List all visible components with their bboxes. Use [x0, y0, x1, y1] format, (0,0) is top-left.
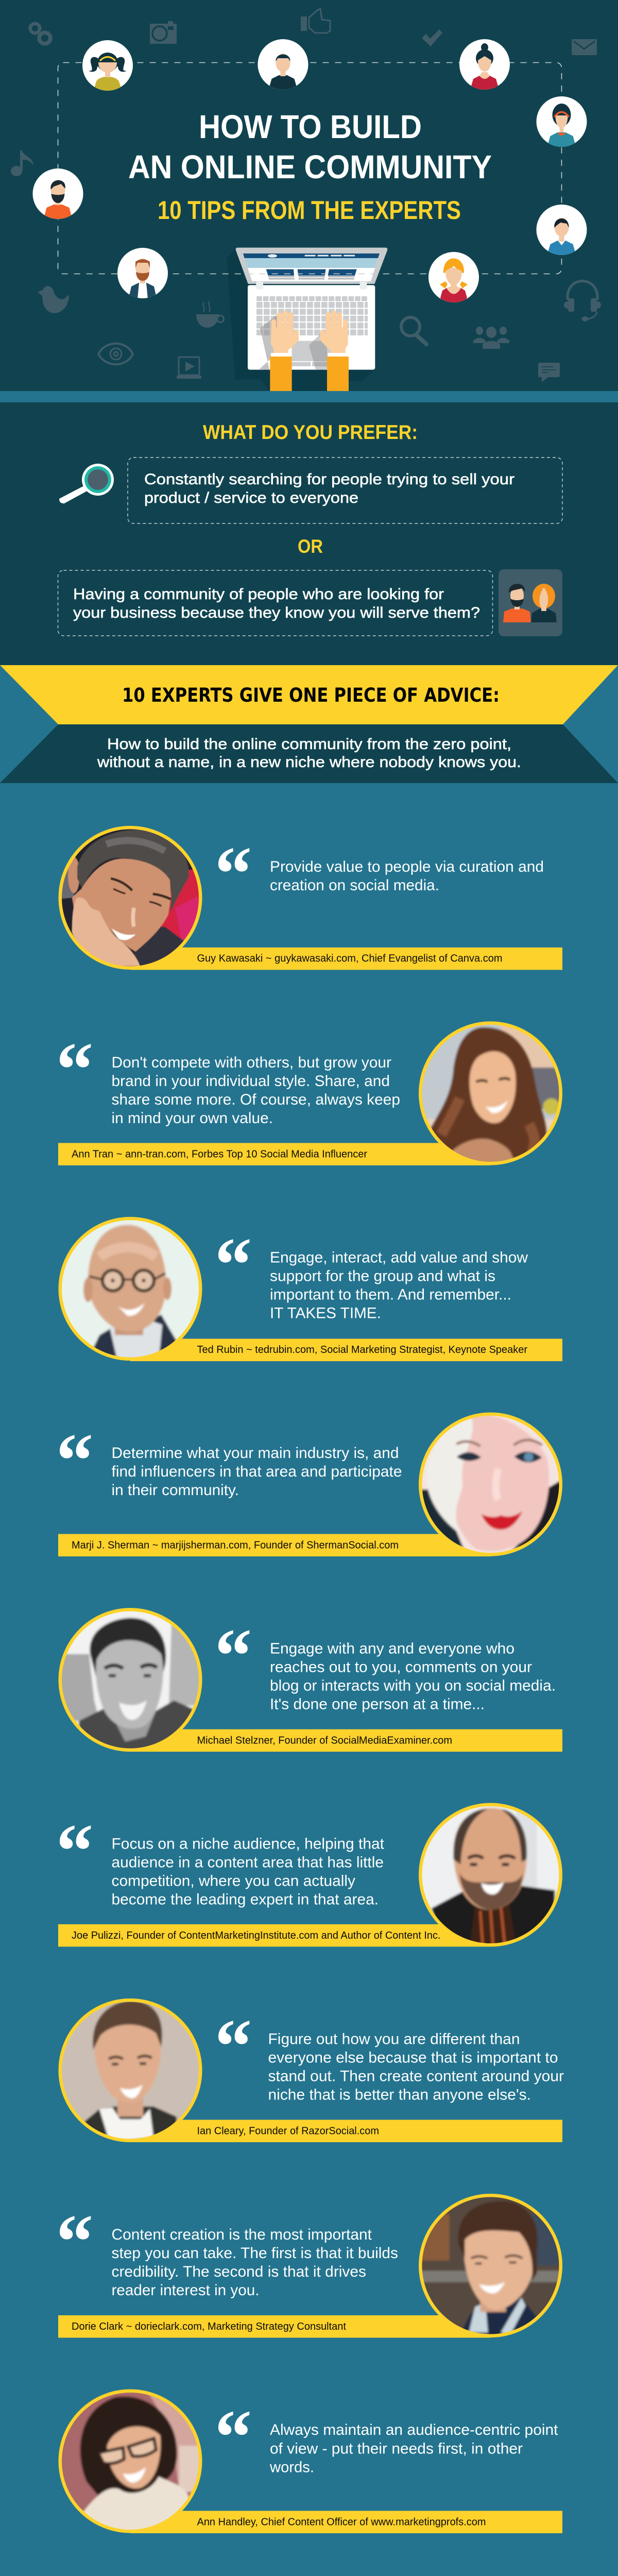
option 1 box: product / service to everyone	[144, 489, 358, 506]
icon: music note	[11, 150, 33, 176]
portrait	[58, 1998, 202, 2142]
quote text: everyone else because that is important to	[268, 2049, 558, 2066]
quote text: audience in a content area that has little	[111, 1854, 384, 1871]
quote text	[270, 1640, 556, 1713]
icon: chat bubble	[538, 363, 560, 382]
author ribbon: Dorie Clark ~ dorieclark.com, Marketing Strategy Consultant	[72, 2321, 346, 2332]
avatar: man in blue shirt	[537, 205, 587, 256]
icon: check mark	[422, 29, 442, 46]
portrait	[58, 826, 202, 970]
portrait	[58, 1217, 202, 1361]
quote text: It's done one person at a time...	[270, 1696, 485, 1713]
banner: dark subheading	[0, 724, 618, 783]
panel: expert 9 Ann Handley	[58, 2389, 562, 2533]
panel: header	[0, 0, 618, 391]
panel: expert 6 Joe Pulizzi	[56, 1803, 562, 1947]
option 2 box	[58, 570, 492, 636]
quote text	[270, 1249, 528, 1322]
icon: video player	[177, 357, 201, 379]
heading: 10 experts: 10 EXPERTS GIVE ONE PIECE OF ADVICE:	[122, 684, 500, 706]
quote text: blog or interacts with you on social media.	[270, 1677, 556, 1694]
avatar: bearded man in jacket	[117, 248, 168, 299]
quote text: important to them. And remember...	[270, 1286, 511, 1303]
author ribbon: Joe Pulizzi, Founder of ContentMarketingInstitute.com and Author of Content Inc.	[72, 1930, 441, 1941]
author ribbon	[130, 1729, 562, 1752]
portrait	[418, 2194, 562, 2338]
icon: magnifier	[401, 317, 426, 344]
quote mark: “	[56, 1027, 93, 1112]
quote text: share some more. Of course, always keep	[111, 1091, 400, 1108]
quote text: step you can take. The first is that it builds	[111, 2245, 398, 2262]
quote text: support for the group and what is	[270, 1267, 495, 1285]
heading: what do you prefer: WHAT DO YOU PREFER:	[203, 421, 418, 444]
panel: expert 7 Ian Cleary	[58, 1998, 564, 2142]
quote text: words.	[269, 2459, 314, 2476]
icon: thumbs up	[301, 9, 330, 33]
dashed frame	[58, 63, 561, 274]
quote text: in their community.	[111, 1482, 239, 1499]
quote text: credibility. The second is that it drives	[111, 2263, 366, 2280]
quote text: of view - put their needs first, in other	[270, 2440, 523, 2458]
quote text: niche that is better than anyone else's.	[268, 2087, 531, 2103]
icon: headphones	[564, 281, 601, 321]
author ribbon: Guy Kawasaki ~ guykawasaki.com, Chief Evangelist of Canva.com	[197, 953, 503, 964]
icon: laptop with typing hands	[227, 248, 387, 391]
panel: expert 4 Marji J. Sherman	[56, 1412, 562, 1556]
author ribbon	[130, 2511, 562, 2533]
author ribbon: Michael Stelzner, Founder of SocialMediaExaminer.com	[197, 1735, 452, 1747]
icon: coffee cup	[196, 301, 224, 328]
author ribbon: Ann Tran ~ ann-tran.com, Forbes Top 10 Social Media Influencer	[72, 1149, 367, 1160]
quote mark: “	[56, 2199, 93, 2284]
quote text	[111, 1054, 400, 1127]
author ribbon	[58, 1534, 491, 1556]
quote mark: “	[215, 2004, 252, 2089]
icon: camera	[150, 21, 177, 44]
portrait	[418, 1021, 562, 1165]
quote text: Don't compete with others, but grow your	[111, 1054, 391, 1071]
hands	[259, 311, 349, 391]
author ribbon: Ted Rubin ~ tedrubin.com, Social Marketing Strategist, Keynote Speaker	[197, 1344, 527, 1355]
quote text: Determine what your main industry is, and	[111, 1445, 399, 1462]
quote text: Content creation is the most important	[111, 2226, 372, 2243]
quote text: reader interest in you.	[111, 2282, 260, 2299]
panel: what do you prefer	[0, 402, 618, 665]
quote text	[111, 1445, 402, 1499]
option 2 box: your business because they know you will serve them?	[73, 604, 480, 621]
avatar: bearded man in orange	[33, 168, 83, 219]
option 1 box	[128, 457, 562, 523]
author ribbon	[130, 947, 562, 970]
author ribbon	[130, 1338, 562, 1361]
portrait	[418, 1412, 562, 1556]
icon: bird	[38, 286, 69, 313]
author ribbon: Marji J. Sherman ~ marjijsherman.com, Founder of ShermanSocial.com	[72, 1539, 399, 1551]
quote text: Engage with any and everyone who	[270, 1640, 514, 1657]
author ribbon	[58, 1924, 491, 1946]
quote text: become the leading expert in that area.	[111, 1891, 379, 1908]
subtitle: 10 TIPS FROM THE EXPERTS	[158, 196, 461, 225]
icon: envelope	[572, 39, 597, 55]
quote mark: “	[215, 1613, 252, 1699]
portrait	[418, 1803, 562, 1947]
quote mark: “	[215, 2395, 252, 2480]
banner: dark subheading: without a name, in a new niche where nobody knows you.	[97, 754, 521, 771]
panel: expert 3 Ted Rubin	[58, 1217, 562, 1361]
portrait	[58, 1607, 202, 1752]
icon: two people tile	[499, 569, 562, 636]
banner: dark subheading: How to build the online community from the zero point,	[107, 736, 511, 753]
author ribbon	[58, 2315, 491, 2338]
quote text: IT TAKES TIME.	[270, 1304, 381, 1322]
avatar: man in dark shirt	[258, 39, 308, 90]
quote text: creation on social media.	[270, 877, 439, 894]
option 1 box: Constantly searching for people trying to sell your	[144, 471, 514, 488]
quote text: reaches out to you, comments on your	[270, 1659, 532, 1675]
quote text: brand in your individual style. Share, and	[111, 1073, 390, 1090]
quote text	[111, 2226, 398, 2299]
quote text: Engage, interact, add value and show	[270, 1249, 528, 1266]
avatar: woman with bun	[459, 39, 510, 90]
keyboard	[256, 296, 368, 336]
or: OR	[298, 536, 323, 557]
quote mark: “	[215, 1222, 252, 1308]
panel: expert 1 Guy Kawasaki	[58, 826, 562, 970]
quote text: Provide value to people via curation and	[270, 858, 544, 875]
quote text: in mind your own value.	[111, 1110, 273, 1127]
icon: gears	[29, 22, 52, 45]
quote mark: “	[215, 831, 252, 917]
avatar: blonde girl	[428, 252, 479, 303]
author ribbon	[130, 2120, 562, 2142]
panel: expert 8 Dorie Clark	[56, 2194, 562, 2338]
quote text: competition, where you can actually	[111, 1872, 355, 1890]
title	[128, 108, 492, 185]
banner: yellow	[0, 665, 618, 724]
author ribbon: Ian Cleary, Founder of RazorSocial.com	[197, 2126, 379, 2137]
icon: people	[473, 327, 509, 349]
quote text: Focus on a niche audience, helping that	[111, 1835, 385, 1853]
icon: magnifying glass	[59, 464, 114, 503]
quote mark: “	[56, 1808, 93, 1894]
avatar: girl with pigtails	[82, 40, 133, 91]
quote text	[270, 858, 544, 894]
portrait	[58, 2389, 202, 2533]
quote text: Figure out how you are different than	[268, 2031, 520, 2047]
panel: expert 2 Ann Tran	[56, 1021, 562, 1165]
quote text	[111, 1835, 385, 1908]
panel: expert 5 Michael Stelzner	[58, 1607, 562, 1752]
quote mark: “	[56, 1418, 93, 1503]
title: AN ONLINE COMMUNITY	[128, 148, 492, 185]
background icons	[11, 9, 601, 382]
quote text: stand out. Then create content around your	[268, 2068, 564, 2084]
quote text	[268, 2031, 564, 2103]
quote text: find influencers in that area and participate	[111, 1463, 402, 1480]
author ribbon	[58, 1143, 491, 1165]
quote text	[269, 2421, 558, 2476]
title: HOW TO BUILD	[199, 108, 422, 145]
option 2 box: Having a community of people who are looking for	[73, 586, 444, 603]
avatar: woman with orange band	[537, 96, 587, 147]
icon: eye	[98, 344, 133, 364]
author ribbon: Ann Handley, Chief Content Officer of www.marketingprofs.com	[197, 2516, 486, 2528]
quote text: Always maintain an audience-centric point	[270, 2421, 558, 2438]
